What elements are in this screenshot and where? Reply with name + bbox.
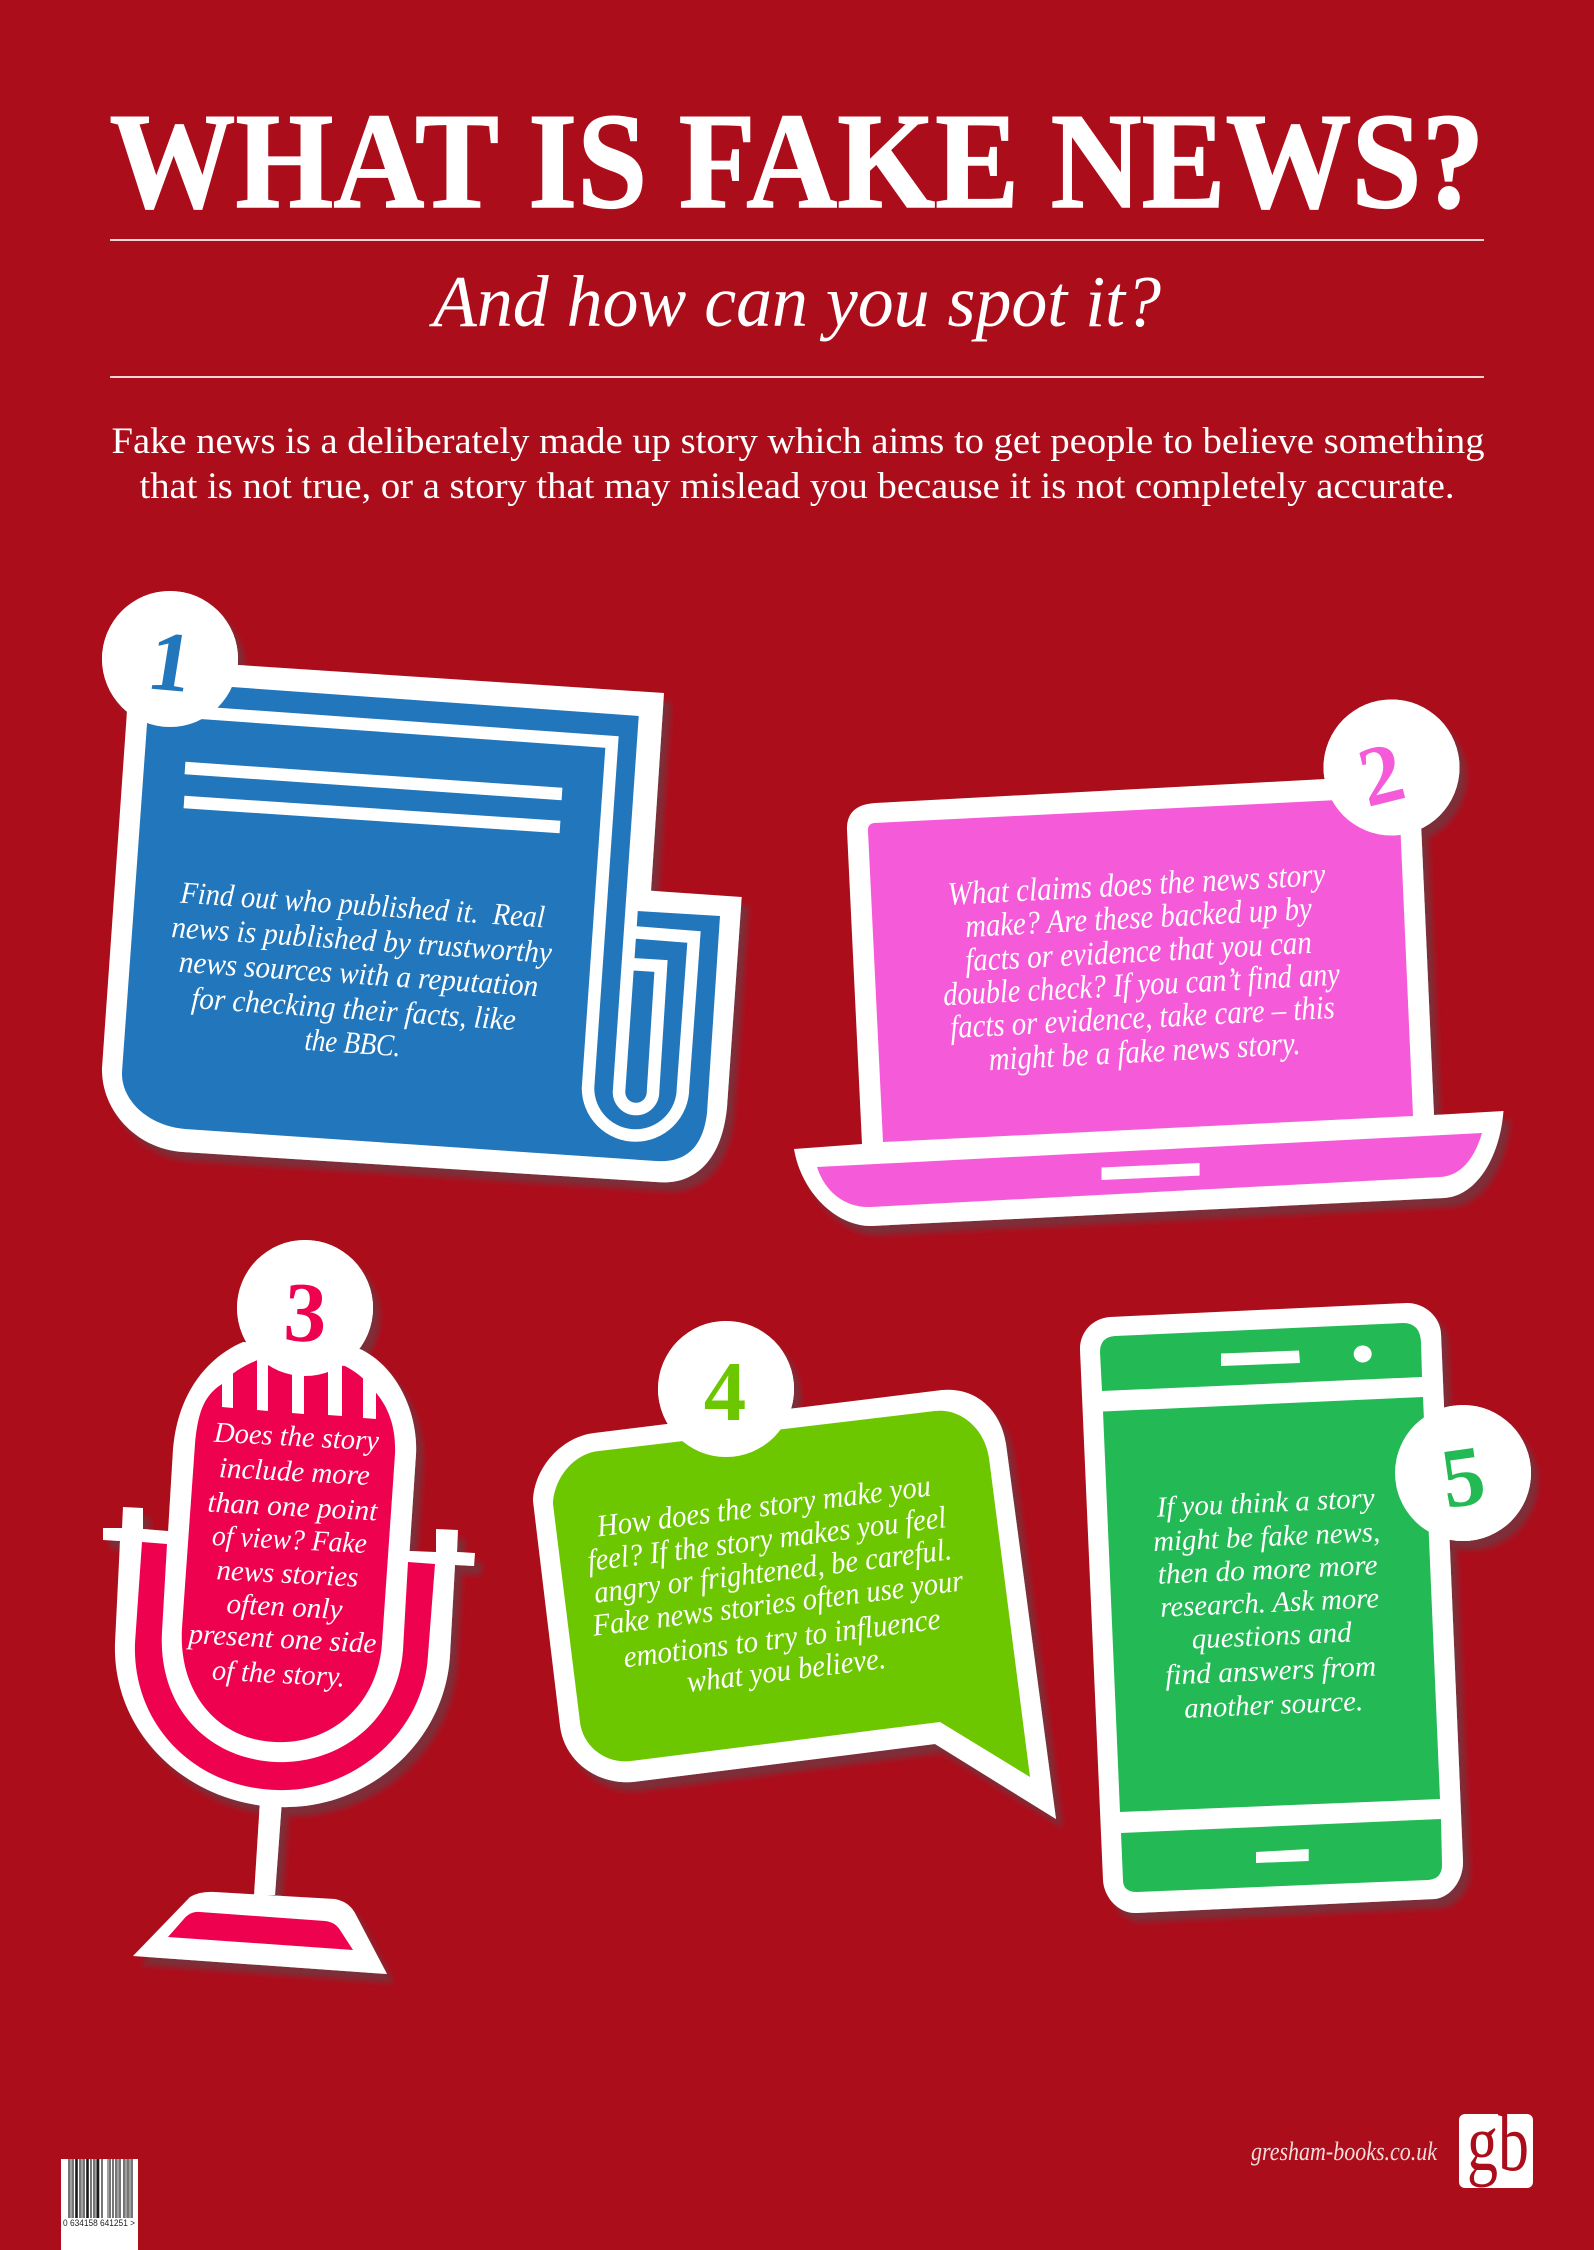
text 4: emotions to try to influence [621, 1601, 942, 1674]
text 2: double check? If you can’t find any [942, 957, 1341, 1013]
text 1: news sources with a reputation [178, 944, 539, 1003]
number 4: 4 [704, 1345, 746, 1439]
newspaper blue sheet [122, 681, 720, 1161]
laptop base [817, 1133, 1482, 1207]
text 2: might be a fake news story. [988, 1026, 1301, 1078]
text 1: news is published by trustworthy [170, 909, 553, 970]
phone speaker [1221, 1350, 1300, 1366]
text 3: news stories [216, 1554, 359, 1594]
phone camera dot [1354, 1346, 1372, 1362]
badge circle 3 [237, 1240, 373, 1376]
intro paragraph: that is not true, or a story that may mislead you because it is not completely accurate. [140, 466, 1454, 507]
text 1: for checking their facts, like [190, 980, 517, 1037]
microphone white silhouette and badge [103, 1240, 475, 1974]
laptop trackpad [1102, 1163, 1200, 1180]
text 5: might be fake news, [1153, 1516, 1381, 1558]
microphone grille bars [222, 1350, 376, 1419]
microphone holder [135, 1542, 435, 1790]
phone home button [1256, 1849, 1309, 1863]
intro paragraph [112, 421, 1484, 507]
barcode [61, 2159, 138, 2250]
number 3: 3 [282, 1265, 329, 1361]
phone top section [1100, 1323, 1422, 1391]
bubble green fill [553, 1411, 1030, 1777]
phone screen [1103, 1397, 1440, 1812]
badge circle 5 [1395, 1405, 1531, 1541]
microphone capsule [182, 1359, 395, 1742]
text 2 [942, 857, 1341, 1078]
badge circle 4 [658, 1321, 794, 1457]
text 4: Fake news stories often use your [590, 1562, 966, 1643]
website url: gresham-books.co.uk [1251, 2137, 1437, 2166]
title: WHAT IS FAKE NEWS? [110, 85, 1484, 237]
laptop white outline and badge [794, 700, 1504, 1226]
text 1: the BBC. [304, 1022, 402, 1063]
microphone base [168, 1912, 353, 1950]
text 3: of the story. [211, 1655, 346, 1693]
text 3: of view? Fake [211, 1520, 368, 1560]
text 3: than one point [207, 1487, 379, 1527]
text 5: another source. [1183, 1685, 1364, 1725]
subtitle: And how can you spot it? [429, 261, 1161, 342]
phone white outline and badge [1080, 1303, 1531, 1913]
bubble white outline and badge [533, 1321, 1056, 1819]
laptop screen [868, 797, 1413, 1142]
number 2: 2 [1349, 724, 1413, 826]
text 3: often only [226, 1588, 343, 1626]
text 4: angry or frightened, be careful. [592, 1531, 954, 1610]
text 2: make? Are these backed up by [964, 891, 1313, 945]
panel 4: speech bubble [533, 1321, 1056, 1819]
text 5: find answers from [1165, 1650, 1377, 1692]
text 1: Find out who published it. Real [179, 875, 546, 934]
text 5 [1153, 1482, 1381, 1725]
number 1: 1 [142, 614, 199, 711]
phone bottom section [1121, 1819, 1442, 1892]
newspaper white outline and badge [102, 591, 742, 1182]
intro paragraph: Fake news is a deliberately made up story which aims to get people to believe something [112, 421, 1484, 462]
text 4: How does the story make you [594, 1468, 933, 1544]
text 5: then do more more [1157, 1549, 1378, 1591]
text 2: facts or evidence, take care – this [949, 990, 1336, 1046]
text 3 [186, 1417, 380, 1693]
panel 1: newspaper [102, 591, 742, 1182]
panel 5: phone [1080, 1303, 1531, 1913]
publisher logo: gb [1467, 2097, 1529, 2188]
text 3: present one side [186, 1618, 377, 1660]
panel 3: microphone [103, 1240, 475, 1974]
text 3: include more [218, 1452, 371, 1492]
text 4: what you believe. [685, 1640, 888, 1699]
text 5: questions and [1191, 1617, 1353, 1655]
barcode: 0 634158 641251 > [63, 2218, 135, 2229]
text 5: research. Ask more [1160, 1582, 1380, 1624]
text 2: What claims does the news story [947, 857, 1326, 913]
text 4 [585, 1468, 966, 1699]
panel 2: laptop [794, 700, 1504, 1226]
badge circle 1 [102, 591, 238, 727]
text 3: Does the story [212, 1417, 380, 1457]
newspaper fold lines [184, 712, 694, 1136]
text 2: facts or evidence that you can [964, 925, 1313, 979]
text 4: feel? If the story makes you feel [585, 1499, 948, 1578]
text 1 [170, 875, 553, 1063]
text 5: If you think a story [1155, 1482, 1375, 1524]
badge circle 2 [1324, 700, 1460, 836]
number 5: 5 [1436, 1428, 1491, 1527]
